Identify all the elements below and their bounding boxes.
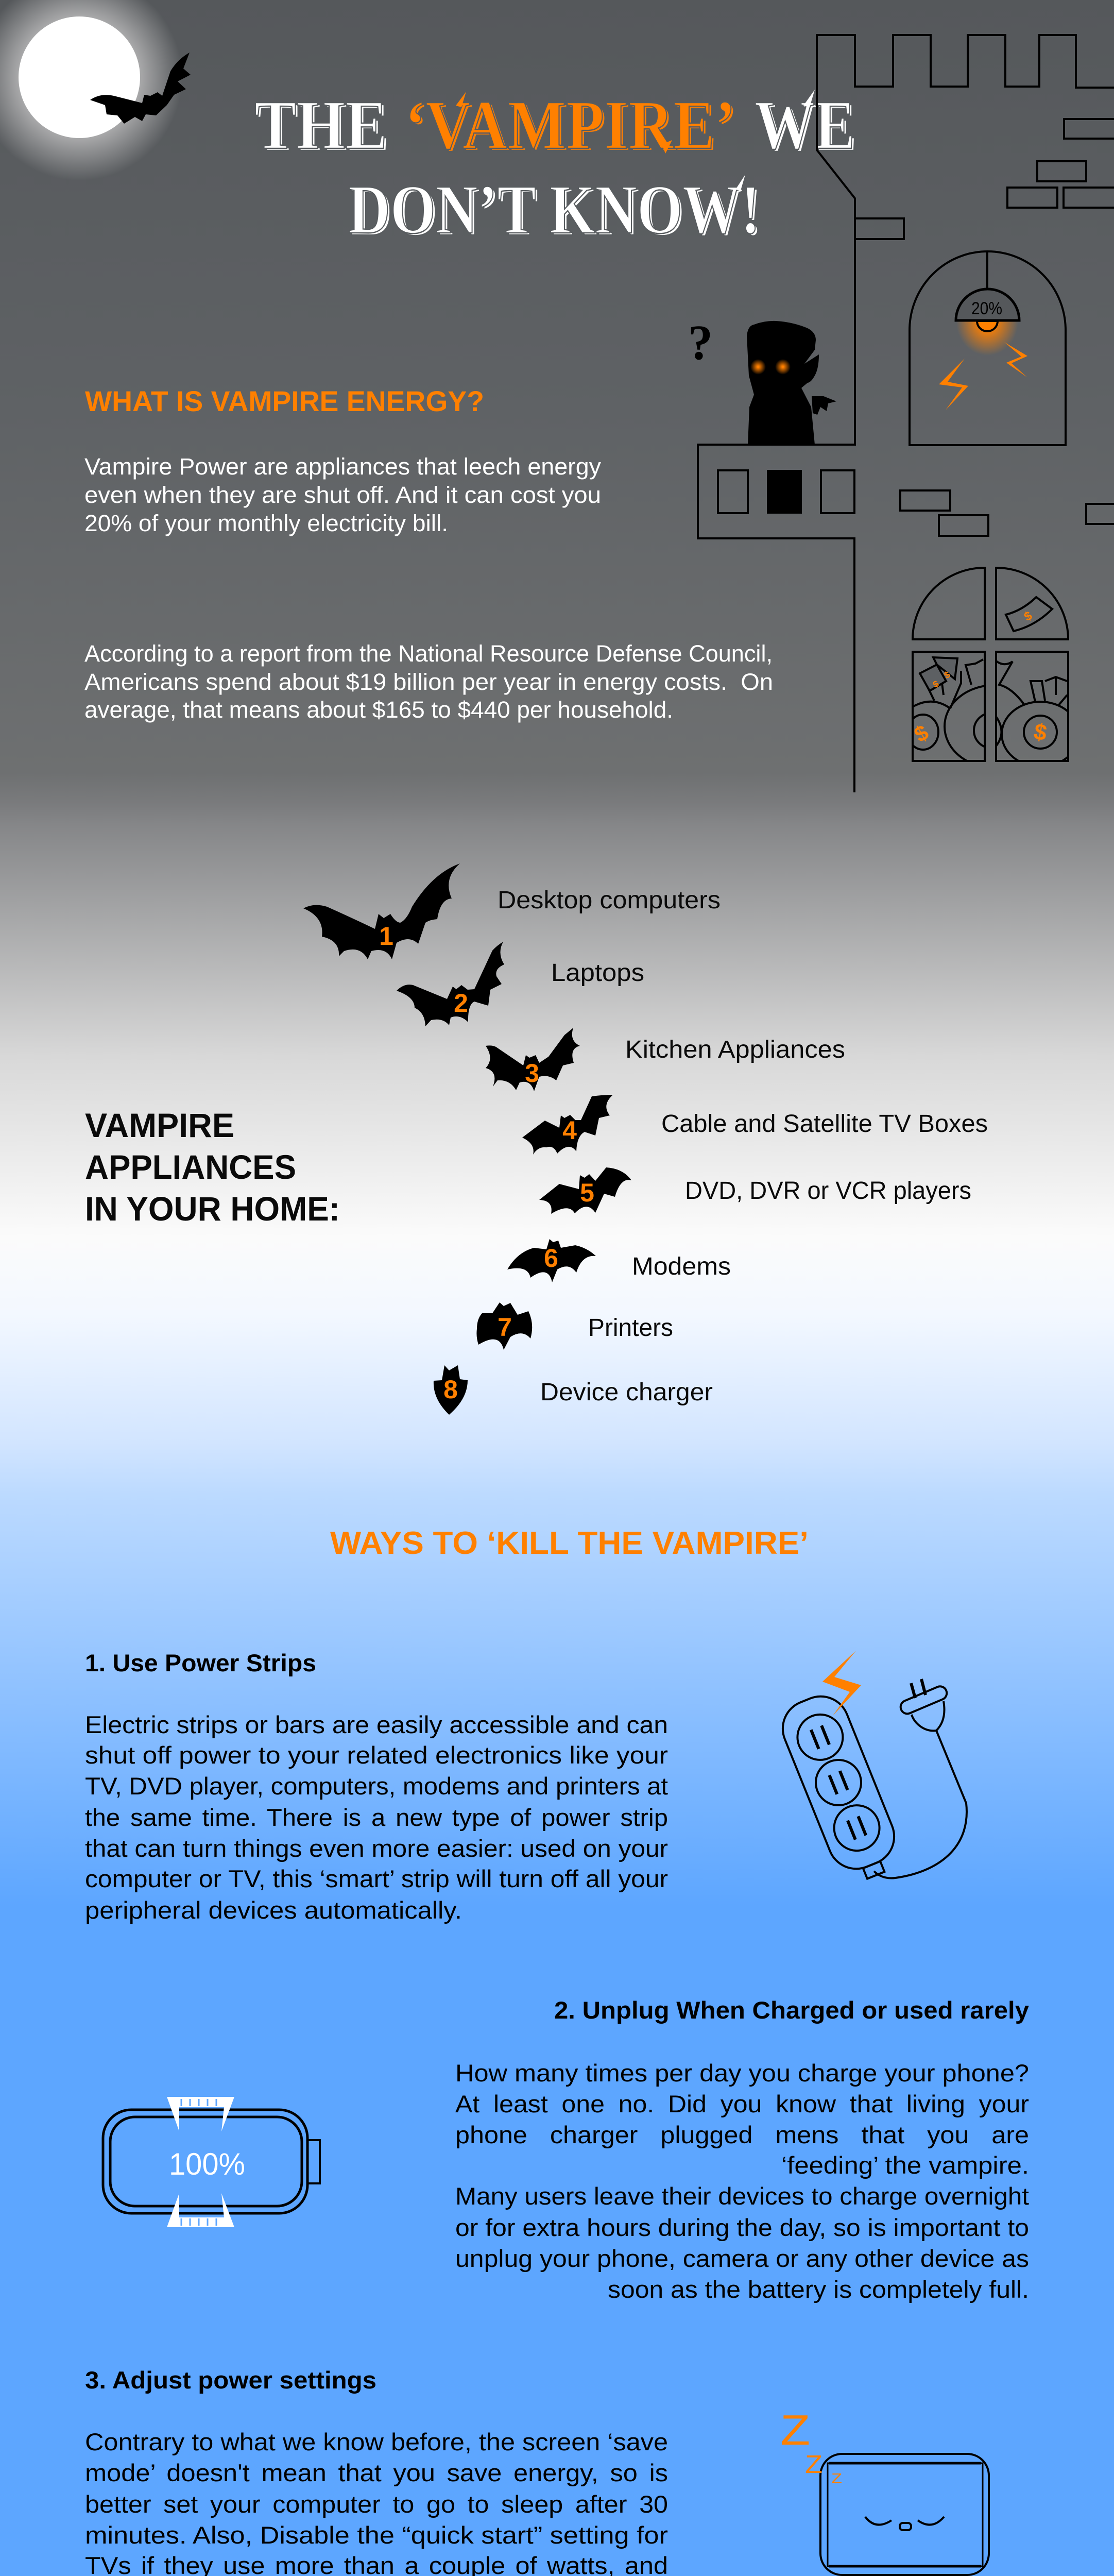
money window [907,568,1079,768]
tip 1 text block: the same time. There is a new type of power strip [85,1804,668,1831]
tip 1 text block: computer or TV, this ‘smart’ strip will turn off all your [85,1865,668,1892]
text block: vampire power definition: 20% of your monthly electricity bill. [84,510,448,536]
icon: sleeping monitor: Z [831,2470,842,2486]
appliance 8: device charger: 8 [443,1375,458,1404]
tip 2 text block [455,2059,1029,2303]
appliance 5: dvd, dvr or vcr players: 5 [580,1178,594,1207]
text block: cost report: Americans spend about $19 billion per year in energy costs. On [84,669,773,695]
appliance 8: device charger [434,1365,713,1415]
heading: vampire appliances in your home: APPLIANCES [85,1148,296,1186]
tip 2 text block: or for extra hours during the day, so is important to [455,2214,1029,2241]
tip 2 text block: unplug your phone, camera or any other device as [455,2245,1029,2272]
arched window with lamp [910,251,1066,445]
money window: $ [942,669,952,681]
tip 1 text block: TV, DVD player, computers, modems and printers at [85,1772,668,1800]
icon: bat by the moon [90,53,191,124]
tip 2 text block: Many users leave their devices to charge overnight [455,2182,1029,2210]
money window: $ [910,720,933,747]
appliance 7: printers: Printers [588,1314,673,1342]
icon: sleeping monitor: Z [805,2451,822,2479]
tip 3 text block: minutes. Also, Disable the “quick start” setting for [85,2521,668,2549]
tip 2 text block: How many times per day you charge your phone? [455,2059,1029,2087]
appliance 5: dvd, dvr or vcr players: DVD, DVR or VCR players [685,1177,971,1205]
appliance 6: modems: 6 [544,1244,558,1273]
appliance 5: dvd, dvr or vcr players [539,1167,971,1214]
appliance 8: device charger: Device charger [540,1379,713,1406]
appliance 2: laptops: 2 [454,989,468,1018]
money window: $ [931,679,940,690]
tip 2 text block: soon as the battery is completely full. [608,2276,1029,2303]
title [254,87,855,248]
appliance 6: modems: Modems [632,1253,731,1280]
heading: ways to kill the vampire: WAYS TO ‘KILL THE VAMPIRE’ [330,1526,809,1561]
title: THE [254,87,387,164]
heading: vampire appliances in your home: IN YOUR HOME: [85,1190,340,1228]
tip 2 text block: At least one no. Did you know that living your [455,2090,1029,2117]
icon: battery with fangs [103,2097,320,2227]
tip 3 text block: better set your computer to go to sleep after 30 [85,2490,668,2518]
heading: vampire appliances in your home: VAMPIRE [85,1106,234,1144]
tip 3 text block: mode’ doesn't mean that you save energy, so is [85,2459,668,2486]
appliance 1: desktop computers: Desktop computers [498,887,721,914]
tip 2 heading: unplug when charged: 2. Unplug When Charged or used rarely [554,1996,1029,2024]
text block: cost report [84,640,773,723]
balcony windows [718,470,854,514]
tip 1 text block [85,1711,668,1924]
icon: sleeping monitor: Z [780,2406,810,2454]
money window: $ [1032,719,1049,746]
tip 2 text block: phone charger plugged mens that you are [455,2121,1029,2148]
tip 1 text block: peripheral devices automatically. [85,1896,462,1924]
appliance 6: modems [507,1239,731,1282]
icon: sleeping monitor [780,2406,989,2576]
icon: battery with fangs: 100% [169,2147,245,2181]
appliance 3: kitchen appliances: 3 [525,1059,539,1088]
text block: vampire power definition [84,453,602,536]
title: WE [755,87,855,164]
heading: vampire appliances in your home [85,1106,340,1228]
appliance 1: desktop computers [303,863,721,959]
appliance 7: printers [476,1302,673,1350]
text block: cost report: According to a report from the National Resource Defense Council, [84,640,773,667]
tip 1 heading: use power strips: 1. Use Power Strips [85,1649,316,1676]
title: DON’T KNOW! [348,171,760,248]
moon with glow [0,0,182,180]
tip 1 text block: shut off power to your related electronics like your [85,1741,668,1769]
heading: what is vampire energy: WHAT IS VAMPIRE ENERGY? [85,385,484,417]
appliance 2: laptops: Laptops [551,959,644,987]
appliance 3: kitchen appliances: Kitchen Appliances [625,1036,845,1063]
tip 2 text block: ‘feeding’ the vampire. [781,2151,1029,2179]
tip 3 text block: Contrary to what we know before, the screen ‘save [85,2428,668,2455]
tip 1 text block: that can turn things even more easier: used on your [85,1835,668,1862]
text block: cost report: average, that means about $165 to $440 per household. [84,697,673,723]
vampire silhouette [747,321,836,445]
appliance 3: kitchen appliances [486,1028,845,1091]
arched window with lamp: 20% [971,299,1002,318]
tip 1 text block: Electric strips or bars are easily accessible and can [85,1711,668,1738]
title: ‘VAMPIRE’ [405,87,735,164]
appliance 7: printers: 7 [498,1313,512,1342]
appliance 4: cable and satellite tv boxes [522,1095,988,1155]
appliance 2: laptops [397,942,644,1026]
money window: $ [1022,608,1035,624]
tip 3 heading: adjust power settings: 3. Adjust power settings [85,2366,376,2394]
text block: vampire power definition: even when they are shut off. And it can cost you [84,482,601,508]
appliance 4: cable and satellite tv boxes: 4 [562,1116,577,1145]
text block: vampire power definition: Vampire Power are appliances that leech energy [84,453,602,480]
icon: power strip with plug [774,1651,967,1888]
appliance 4: cable and satellite tv boxes: Cable and Satellite TV Boxes [661,1110,988,1138]
castle tower outline [698,35,1114,792]
icon: question mark: ? [688,315,713,370]
appliance 1: desktop computers: 1 [379,922,393,951]
tip 3 text block [85,2428,669,2576]
